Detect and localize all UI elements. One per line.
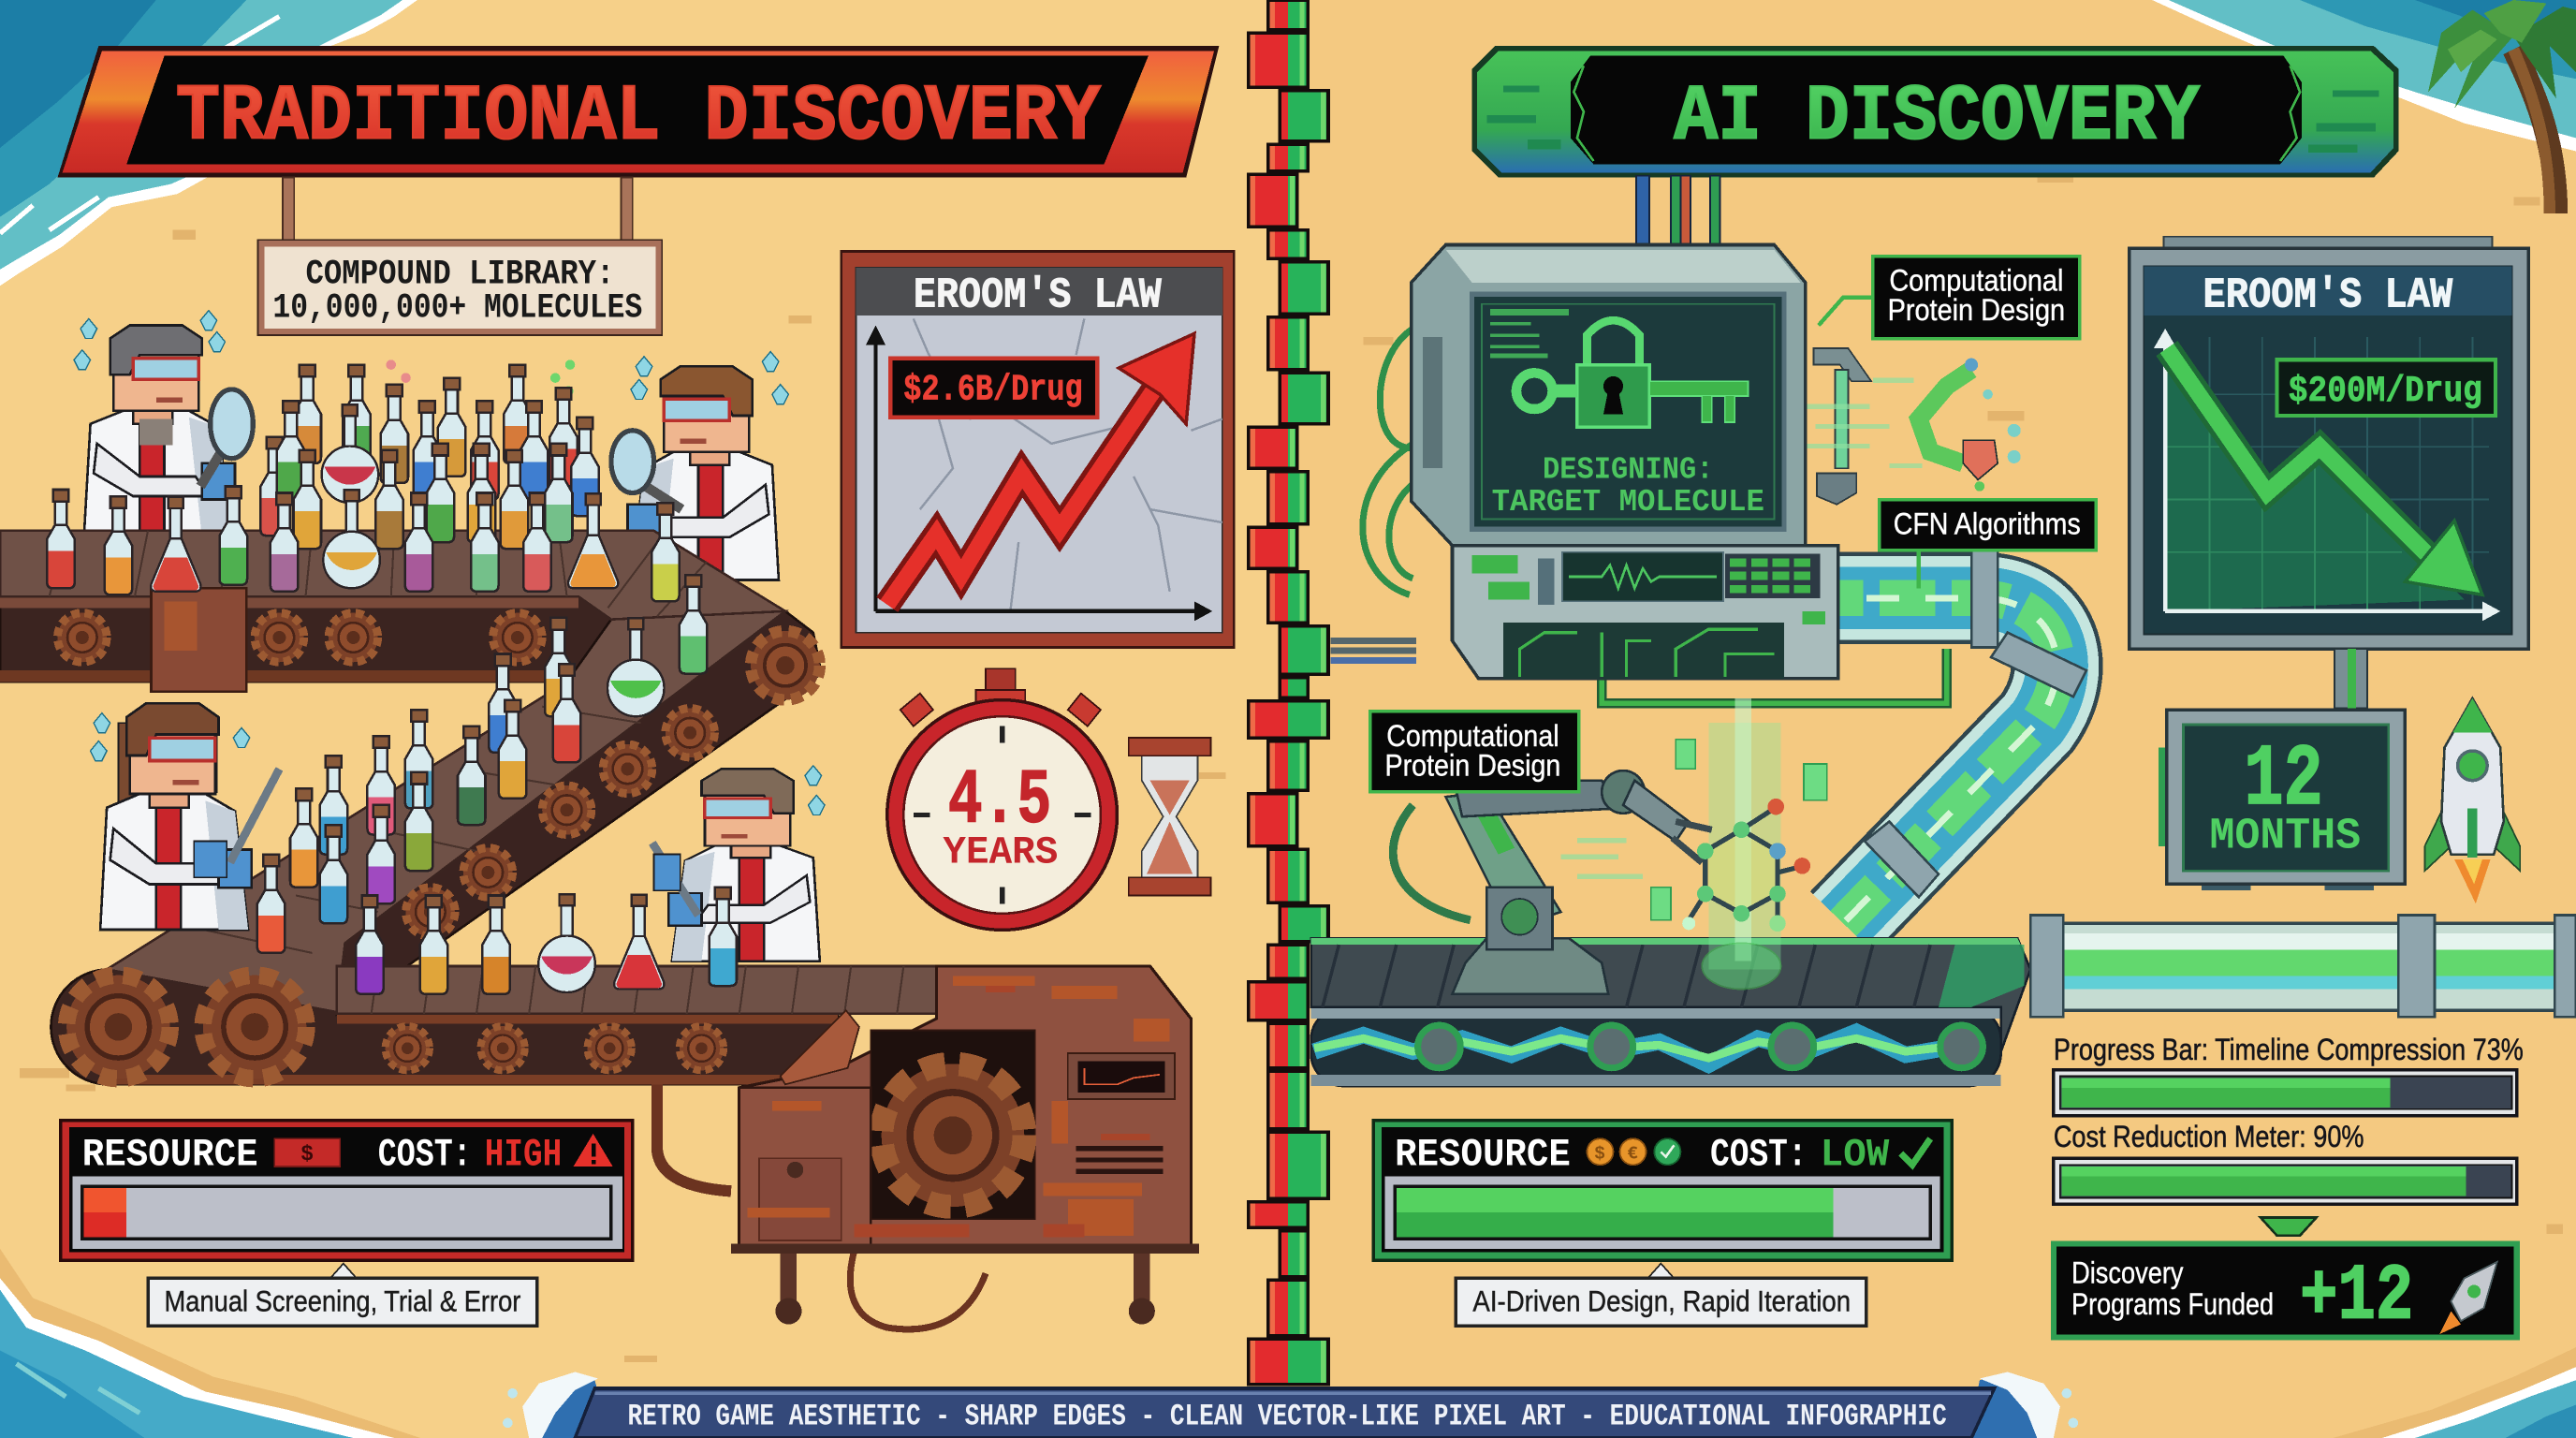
robot arm (1393, 770, 1712, 994)
icon: small rocket (2439, 1262, 2497, 1334)
callout: computational protein design (lower): Protein Design (1385, 748, 1560, 782)
callout: cfn algorithms (1880, 500, 2096, 588)
stopwatch: 4.5 years (887, 668, 1117, 930)
support post (2334, 649, 2367, 708)
conveyor: ai belt (1311, 938, 2030, 1086)
arrow: down to funded panel (2261, 1217, 2317, 1236)
caption: manual screening: Manual Screening, Trial & Error (165, 1284, 520, 1318)
machine: rusty old machine (657, 966, 1199, 1329)
bar fill: high cost (84, 1188, 126, 1238)
top belt side (0, 596, 611, 682)
footer banner (503, 1372, 2078, 1438)
red rising arrow (887, 333, 1194, 605)
water: bottom right corner (2333, 1347, 2576, 1438)
callout: computational protein design (lower): Computational (1386, 719, 1559, 753)
water: top right corner (2152, 0, 2576, 151)
icon: left wave (503, 1372, 611, 1438)
meter: cost reduction (2054, 1120, 2517, 1204)
molecule: target molecule (1560, 740, 1827, 932)
scientist: short hair with tongs and flask (652, 766, 825, 986)
banner: ai discovery (1472, 46, 2398, 178)
diagonal belt side (337, 611, 822, 1014)
icon: check mark (1901, 1138, 1930, 1165)
icon: coins: € (1627, 1143, 1638, 1164)
label: cost per drug (890, 359, 1097, 418)
water: bottom left corner (0, 1249, 420, 1438)
panel: 12 months (2159, 710, 2405, 890)
rollers (1418, 1025, 1983, 1068)
label: ai cost per drug: $200M/Drug (2289, 371, 2482, 412)
text: cost: COST: (378, 1132, 472, 1177)
caption: manual screening (148, 1264, 537, 1326)
rust plate (152, 588, 246, 692)
stopwatch: 4.5 years: YEARS (943, 829, 1058, 874)
meter: cost reduction: Cost Reduction Meter: 90% (2054, 1120, 2364, 1153)
scientist: brown hair with magnifier (611, 352, 788, 580)
callout: computational protein design (upper): Protein Design (1888, 293, 2065, 327)
bar fill: low cost (1397, 1188, 1834, 1238)
bottom belt surface (337, 966, 970, 1014)
icon: dollar bill: $ (300, 1142, 314, 1167)
icon: hourglass (1129, 738, 1211, 895)
pipe: horizontal glowing pipe (2030, 916, 2576, 1017)
heading: eroom's law: EROOM'S LAW (2203, 271, 2453, 319)
wires (1363, 325, 1419, 594)
scientist: long hair with tongs (91, 703, 279, 930)
sign posts (283, 178, 633, 240)
green falling arrow (2167, 348, 2482, 594)
computer: ai terminal (1331, 244, 1947, 703)
text: footer caption: RETRO GAME AESTHETIC - SHARP EDGES - CLEAN VECTOR-LIKE PIXEL ART - EDUCATIONAL INFOGRAPHIC (627, 1400, 1947, 1434)
panel: resource cost high (61, 1121, 633, 1260)
scientist: grey hair with magnifier (74, 311, 253, 539)
flasks on conveyor (47, 365, 707, 994)
heading: traditional discovery: TRADITIONAL DISCOVERY (176, 73, 1101, 162)
palm tree (2428, 0, 2576, 213)
icon: rocket (2424, 698, 2520, 903)
heading: ai discovery: AI DISCOVERY (1674, 73, 2200, 162)
computer: ai terminal: TARGET MOLECULE (1492, 485, 1764, 521)
icon: lock and key (1516, 320, 1748, 427)
panel: discovery programs funded: Programs Funded (2071, 1287, 2274, 1321)
callout: computational protein design (upper) (1819, 257, 2080, 339)
axes (2165, 342, 2489, 611)
text: 4.5 years: 4.5 (948, 757, 1051, 845)
caption: ai-driven design: AI-Driven Design, Rapid Iteration (1472, 1284, 1851, 1318)
text: resource: RESOURCE (1395, 1132, 1571, 1177)
callout: computational protein design (upper): Computational (1889, 264, 2063, 298)
banner: traditional discovery (57, 46, 1219, 178)
chart: ai eroom's law (2130, 237, 2528, 649)
text: 12 months: 12 (2244, 731, 2323, 829)
progress bar (2054, 1158, 2517, 1204)
sign: compound library (258, 240, 662, 335)
label: cost per drug: $2.6B/Drug (903, 369, 1083, 410)
callout: computational protein design (lower) (1370, 712, 1579, 792)
label: ai cost per drug (2277, 360, 2496, 416)
callout: cfn algorithms: CFN Algorithms (1894, 506, 2081, 540)
sign: compound library: 10,000,000+ MOLECULES (272, 289, 642, 329)
icon: coins: $ (1594, 1143, 1605, 1164)
bubbles above flasks (386, 360, 575, 398)
top belt surface (0, 531, 785, 620)
icon: warning triangle (574, 1134, 613, 1167)
axes (875, 337, 1203, 611)
panel: resource cost low (1373, 1121, 1952, 1260)
icon: printing arm and protein molecule (1808, 348, 2021, 505)
text: cost: COST: (1710, 1132, 1808, 1177)
chart: traditional eroom's law (842, 252, 1234, 647)
meter: timeline compression (2054, 1033, 2524, 1116)
bottom belt side (51, 969, 838, 1084)
energy stream (1314, 1032, 1963, 1064)
icon: dollar bill (274, 1138, 340, 1167)
water: top left corner (0, 0, 417, 286)
center divider: red and green blocks (1247, 0, 1330, 1386)
progress bar (2054, 1070, 2517, 1116)
diagonal belt surface (107, 611, 785, 1012)
text: low: LOW (1821, 1132, 1890, 1177)
cables: banner to computer (1630, 176, 1721, 263)
text: resource: RESOURCE (82, 1132, 258, 1177)
heading: eroom's law: EROOM'S LAW (914, 271, 1162, 319)
caption: ai-driven design (1456, 1264, 1866, 1326)
conveyor: traditional, rusty three-level belt (0, 531, 970, 1084)
text: designing target molecule: DESIGNING: (1543, 453, 1714, 489)
text: high: HIGH (485, 1132, 562, 1177)
gears (57, 613, 107, 662)
icon: coins (1587, 1138, 1680, 1165)
panel: discovery programs funded (2054, 1244, 2517, 1343)
text: compound library: COMPOUND LIBRARY: (305, 256, 614, 295)
text: plus 12: +12 (2300, 1254, 2413, 1343)
panel: 12 months: MONTHS (2210, 813, 2361, 862)
pipe: glowing curved pipe (1808, 549, 2086, 923)
beam: green hologram (1702, 698, 1781, 990)
text: discovery programs funded: Discovery (2071, 1256, 2184, 1290)
icon: right wave (1969, 1372, 2078, 1438)
computer base (1453, 546, 1838, 679)
